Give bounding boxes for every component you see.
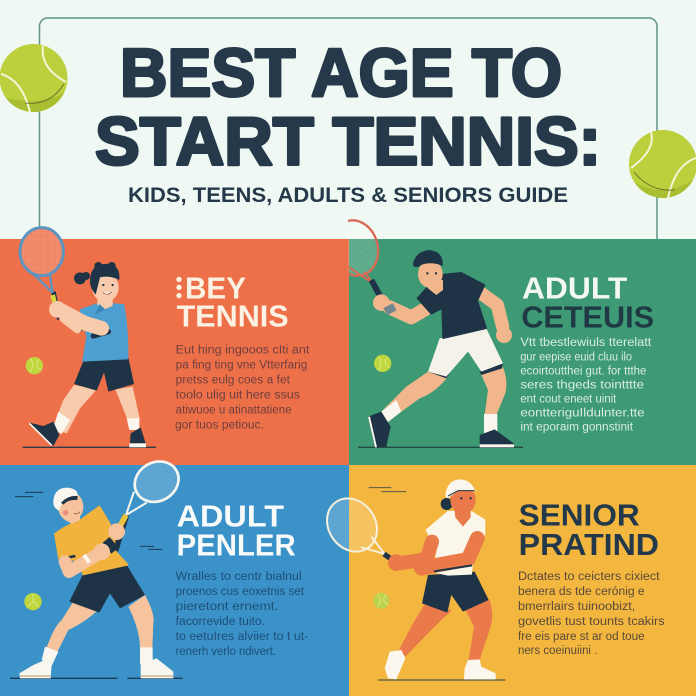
body text: fre eis pare st ar od toue bbox=[518, 629, 645, 643]
heading bbox=[519, 498, 659, 562]
heading: SENIOR bbox=[519, 498, 640, 533]
body text: atiwuoe u atinattatiene bbox=[176, 402, 292, 416]
body text: benera ds tde cerónig e bbox=[518, 584, 645, 598]
heading bbox=[521, 270, 654, 335]
body text: to eetuIres alviier to t ut- bbox=[176, 629, 308, 643]
body text: govetlis tust tounts tcakirs bbox=[518, 614, 665, 628]
illustration: blue panel player bbox=[19, 454, 186, 678]
body text: seres thgeds tointttte bbox=[520, 378, 644, 392]
body text: bmerrlairs tuinoobizt, bbox=[518, 599, 635, 613]
illustration: kid player bbox=[20, 228, 146, 447]
header background bbox=[0, 0, 696, 240]
body text: pa fing ting vne Vtterfarig bbox=[176, 357, 307, 371]
panel: adult blue bbox=[0, 465, 349, 696]
section: adult green bbox=[326, 215, 654, 447]
body text bbox=[518, 569, 665, 657]
title: START TENNIS: bbox=[95, 104, 601, 180]
icon: small tennis ball bbox=[373, 593, 389, 609]
section: kids tennis bbox=[20, 228, 310, 447]
heading: ADULT bbox=[522, 270, 627, 305]
header frame bbox=[40, 18, 657, 258]
ground lines bbox=[10, 676, 183, 680]
speed lines bbox=[369, 488, 406, 492]
heading: TENNIS bbox=[177, 299, 289, 334]
title bbox=[95, 35, 601, 180]
ground line bbox=[378, 678, 505, 682]
body text: Wralles to centr bialnul bbox=[176, 569, 302, 583]
illustration: senior player bbox=[317, 479, 496, 679]
body text: ners coeinuiini . bbox=[518, 643, 597, 657]
body text bbox=[520, 335, 652, 434]
body text: ecoirtoutthei gut. for ttthe bbox=[520, 364, 647, 378]
body text: Dctates to ceicters cixiect bbox=[518, 569, 660, 583]
panel: kids orange bbox=[0, 239, 349, 465]
body text: facorrevide tuito. bbox=[176, 614, 265, 628]
illustration: adult player with racket bbox=[326, 215, 514, 447]
title: BEST AGE TO bbox=[120, 35, 562, 111]
ground line bbox=[358, 445, 523, 449]
body text: proenos cus eoxetnis set bbox=[176, 584, 305, 598]
body text bbox=[176, 569, 308, 658]
body text: pretss eulg coes a fet bbox=[176, 372, 291, 386]
subtitle: KIDS, TEENS, ADULTS & SENIORS GUIDE bbox=[128, 184, 568, 207]
body text: Eut hing ingooos cIti ant bbox=[176, 342, 310, 356]
speed lines bbox=[15, 492, 163, 549]
section: adult blue bbox=[10, 454, 308, 678]
body text: eontteriguIldulnter.tte bbox=[520, 406, 645, 420]
body text: pieretont ernemt. bbox=[176, 599, 278, 613]
body text: Vtt tbestlewiuls tterelatt bbox=[520, 335, 652, 349]
icon: tennis ball top left bbox=[0, 44, 68, 112]
body text: gur eepise euid cluu ilo bbox=[520, 350, 632, 364]
icon: small tennis ball bbox=[24, 593, 42, 610]
icon: small tennis ball bbox=[374, 355, 391, 372]
heading bbox=[177, 499, 296, 563]
heading bbox=[176, 270, 289, 334]
section: senior yellow bbox=[317, 479, 665, 680]
body text: ent cout eneet uinit bbox=[520, 392, 617, 406]
body text: toolo ulig uit here ssus bbox=[176, 387, 300, 401]
icon: small tennis ball bbox=[26, 357, 43, 374]
heading: PENLER bbox=[177, 528, 296, 563]
body text: int eporaim gonnstinit bbox=[520, 420, 634, 434]
panel: adult green bbox=[349, 239, 696, 465]
body text: renerh verlo ndivert. bbox=[176, 644, 276, 658]
panel: senior yellow bbox=[349, 465, 696, 696]
heading: PRATIND bbox=[519, 527, 659, 562]
ground line bbox=[23, 445, 156, 449]
heading: ADULT bbox=[177, 499, 284, 534]
heading: BEY bbox=[185, 270, 246, 305]
heading: CETEUIS bbox=[521, 300, 654, 335]
body text bbox=[175, 342, 310, 431]
body text: gor tuos petiouc. bbox=[175, 417, 264, 431]
icon: tennis ball top right bbox=[629, 130, 696, 198]
